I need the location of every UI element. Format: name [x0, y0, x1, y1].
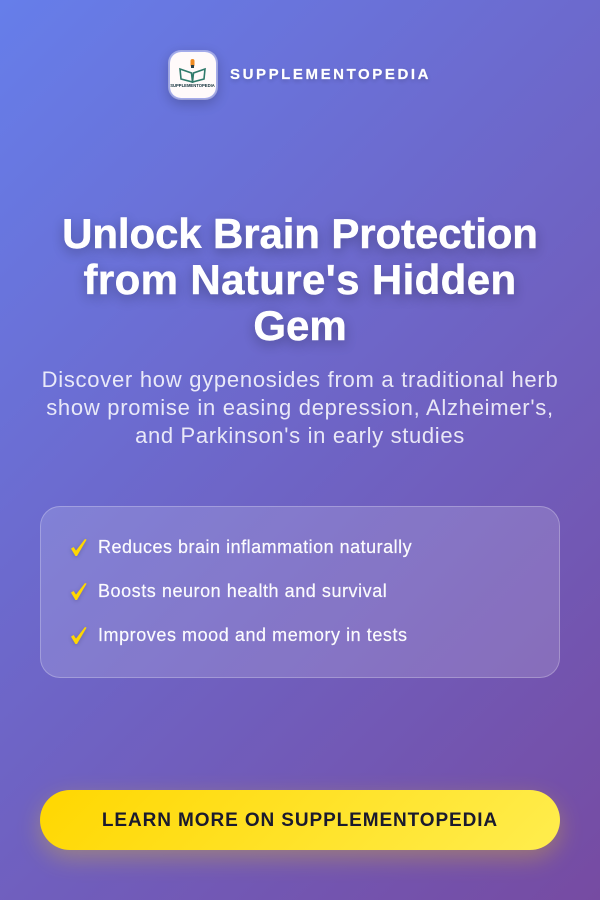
subtitle	[42, 367, 558, 448]
benefit 2	[70, 581, 387, 602]
benefit 1	[70, 537, 412, 558]
subtitle: Discover how gypenosides from a traditional herb	[42, 367, 558, 392]
benefit 3	[70, 625, 408, 646]
subtitle: show promise in easing depression, Alzheimer's,	[46, 395, 554, 420]
benefit text: Boosts neuron health and survival	[98, 581, 387, 601]
benefit text: Reduces brain inflammation naturally	[98, 537, 412, 557]
button: call to action	[40, 790, 560, 850]
button: call to action: LEARN MORE ON SUPPLEMENTOPEDIA	[102, 810, 498, 831]
subtitle: and Parkinson's in early studies	[135, 423, 465, 448]
benefit text: Improves mood and memory in tests	[98, 625, 408, 645]
title: from Nature's Hidden	[84, 256, 516, 303]
title: Gem	[253, 302, 347, 349]
panel: benefits	[40, 506, 560, 678]
icon: check	[70, 539, 87, 558]
brand name: SUPPLEMENTOPEDIA	[230, 66, 431, 83]
icon: check	[70, 627, 87, 646]
header: logo and brand	[163, 49, 431, 109]
icon: logo badge	[168, 50, 218, 100]
title	[58, 210, 541, 350]
icon: check	[70, 583, 87, 602]
icon: logo badge: SUPPLEMENTOPEDIA	[170, 83, 215, 88]
title: Unlock Brain Protection	[62, 210, 538, 257]
